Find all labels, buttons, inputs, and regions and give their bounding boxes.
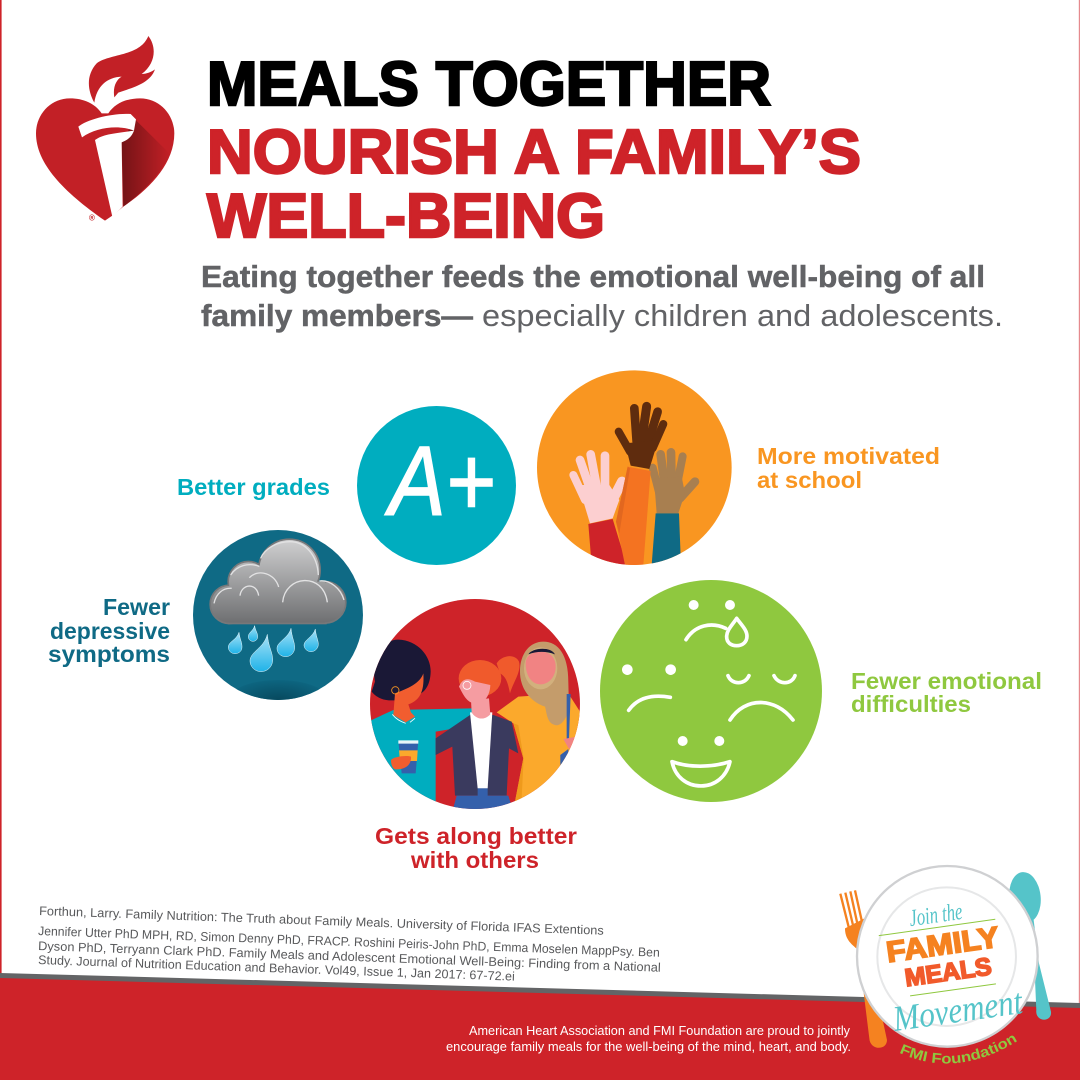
label: more motivated at school: More motivated <box>757 443 940 469</box>
subtitle: family members— <box>201 298 473 333</box>
references text: Forthun, Larry. Family Nutrition: The Truth about Family Meals. University of Florida IFAS Extentions <box>39 904 604 938</box>
plate wording <box>875 892 1026 1039</box>
label: more motivated at school <box>757 443 940 493</box>
icon: fork <box>840 890 887 1048</box>
plate wording: FAMILY <box>884 921 1002 969</box>
icon: spoon <box>1007 871 1051 1020</box>
icon: rain cloud circle <box>193 530 363 700</box>
subtitle <box>201 259 1003 333</box>
icon: raised hands circle <box>537 370 732 565</box>
plate wording: MEALS <box>903 953 993 992</box>
icon: A+ circle <box>357 406 516 565</box>
icon: American Heart Association heart and torch logo <box>36 36 174 222</box>
FMI Foundation curved label: FMI Foundation <box>900 1036 1017 1064</box>
icon: A+ circle: A+ <box>385 426 495 536</box>
label: fewer emotional difficulties <box>851 668 1042 717</box>
footer statement <box>446 1024 851 1054</box>
label: gets along better with others: Gets along better <box>375 823 577 849</box>
label: gets along better with others: with others <box>410 847 539 873</box>
references text: Dyson PhD, Terryann Clark PhD. Family Meals and Adolescent Emotional Well-Being: Finding from a National <box>38 939 661 975</box>
footer band <box>0 973 1080 1080</box>
label: fewer emotional difficulties: difficulties <box>851 691 971 717</box>
plate wording: Movement <box>890 981 1026 1039</box>
icon: American Heart Association heart and torch logo: ® <box>89 213 95 222</box>
badge: Family Meals Movement plate <box>839 864 1052 1064</box>
subtitle: Eating together feeds the emotional well-being of all <box>201 259 985 294</box>
label: fewer depressive symptoms: depressive <box>50 618 170 644</box>
plate wording: Join the <box>908 899 964 932</box>
title: MEALS TOGETHER <box>207 50 771 119</box>
references text: Jennifer Utter PhD MPH, RD, Simon Denny PhD, FRACP. Roshini Peiris-John PhD, Emma Moselen MappPsy. Ben <box>38 924 660 960</box>
title <box>207 50 861 251</box>
references text: Study. Journal of Nutrition Education and Behavior. Vol49, Issue 1, Jan 2017: 67-72.ei <box>38 953 515 984</box>
label: better grades: Better grades <box>177 474 330 500</box>
title: NOURISH A FAMILY’S <box>207 118 861 187</box>
references text <box>38 904 661 984</box>
icon: three friends circle <box>365 599 580 812</box>
title: WELL-BEING <box>207 182 605 251</box>
footer statement: encourage family meals for the well-being of the mind, heart, and body. <box>446 1040 851 1054</box>
label: fewer depressive symptoms: Fewer <box>103 594 170 620</box>
label: fewer depressive symptoms <box>48 594 170 667</box>
label: fewer emotional difficulties: Fewer emotional <box>851 668 1042 694</box>
label: gets along better with others <box>375 823 577 873</box>
label: more motivated at school: at school <box>757 467 862 493</box>
label: fewer depressive symptoms: symptoms <box>48 641 170 667</box>
footer statement: American Heart Association and FMI Foundation are proud to jointly <box>469 1024 851 1038</box>
icon: emotional faces circle <box>600 580 822 802</box>
subtitle: especially children and adolescents. <box>482 298 1003 333</box>
